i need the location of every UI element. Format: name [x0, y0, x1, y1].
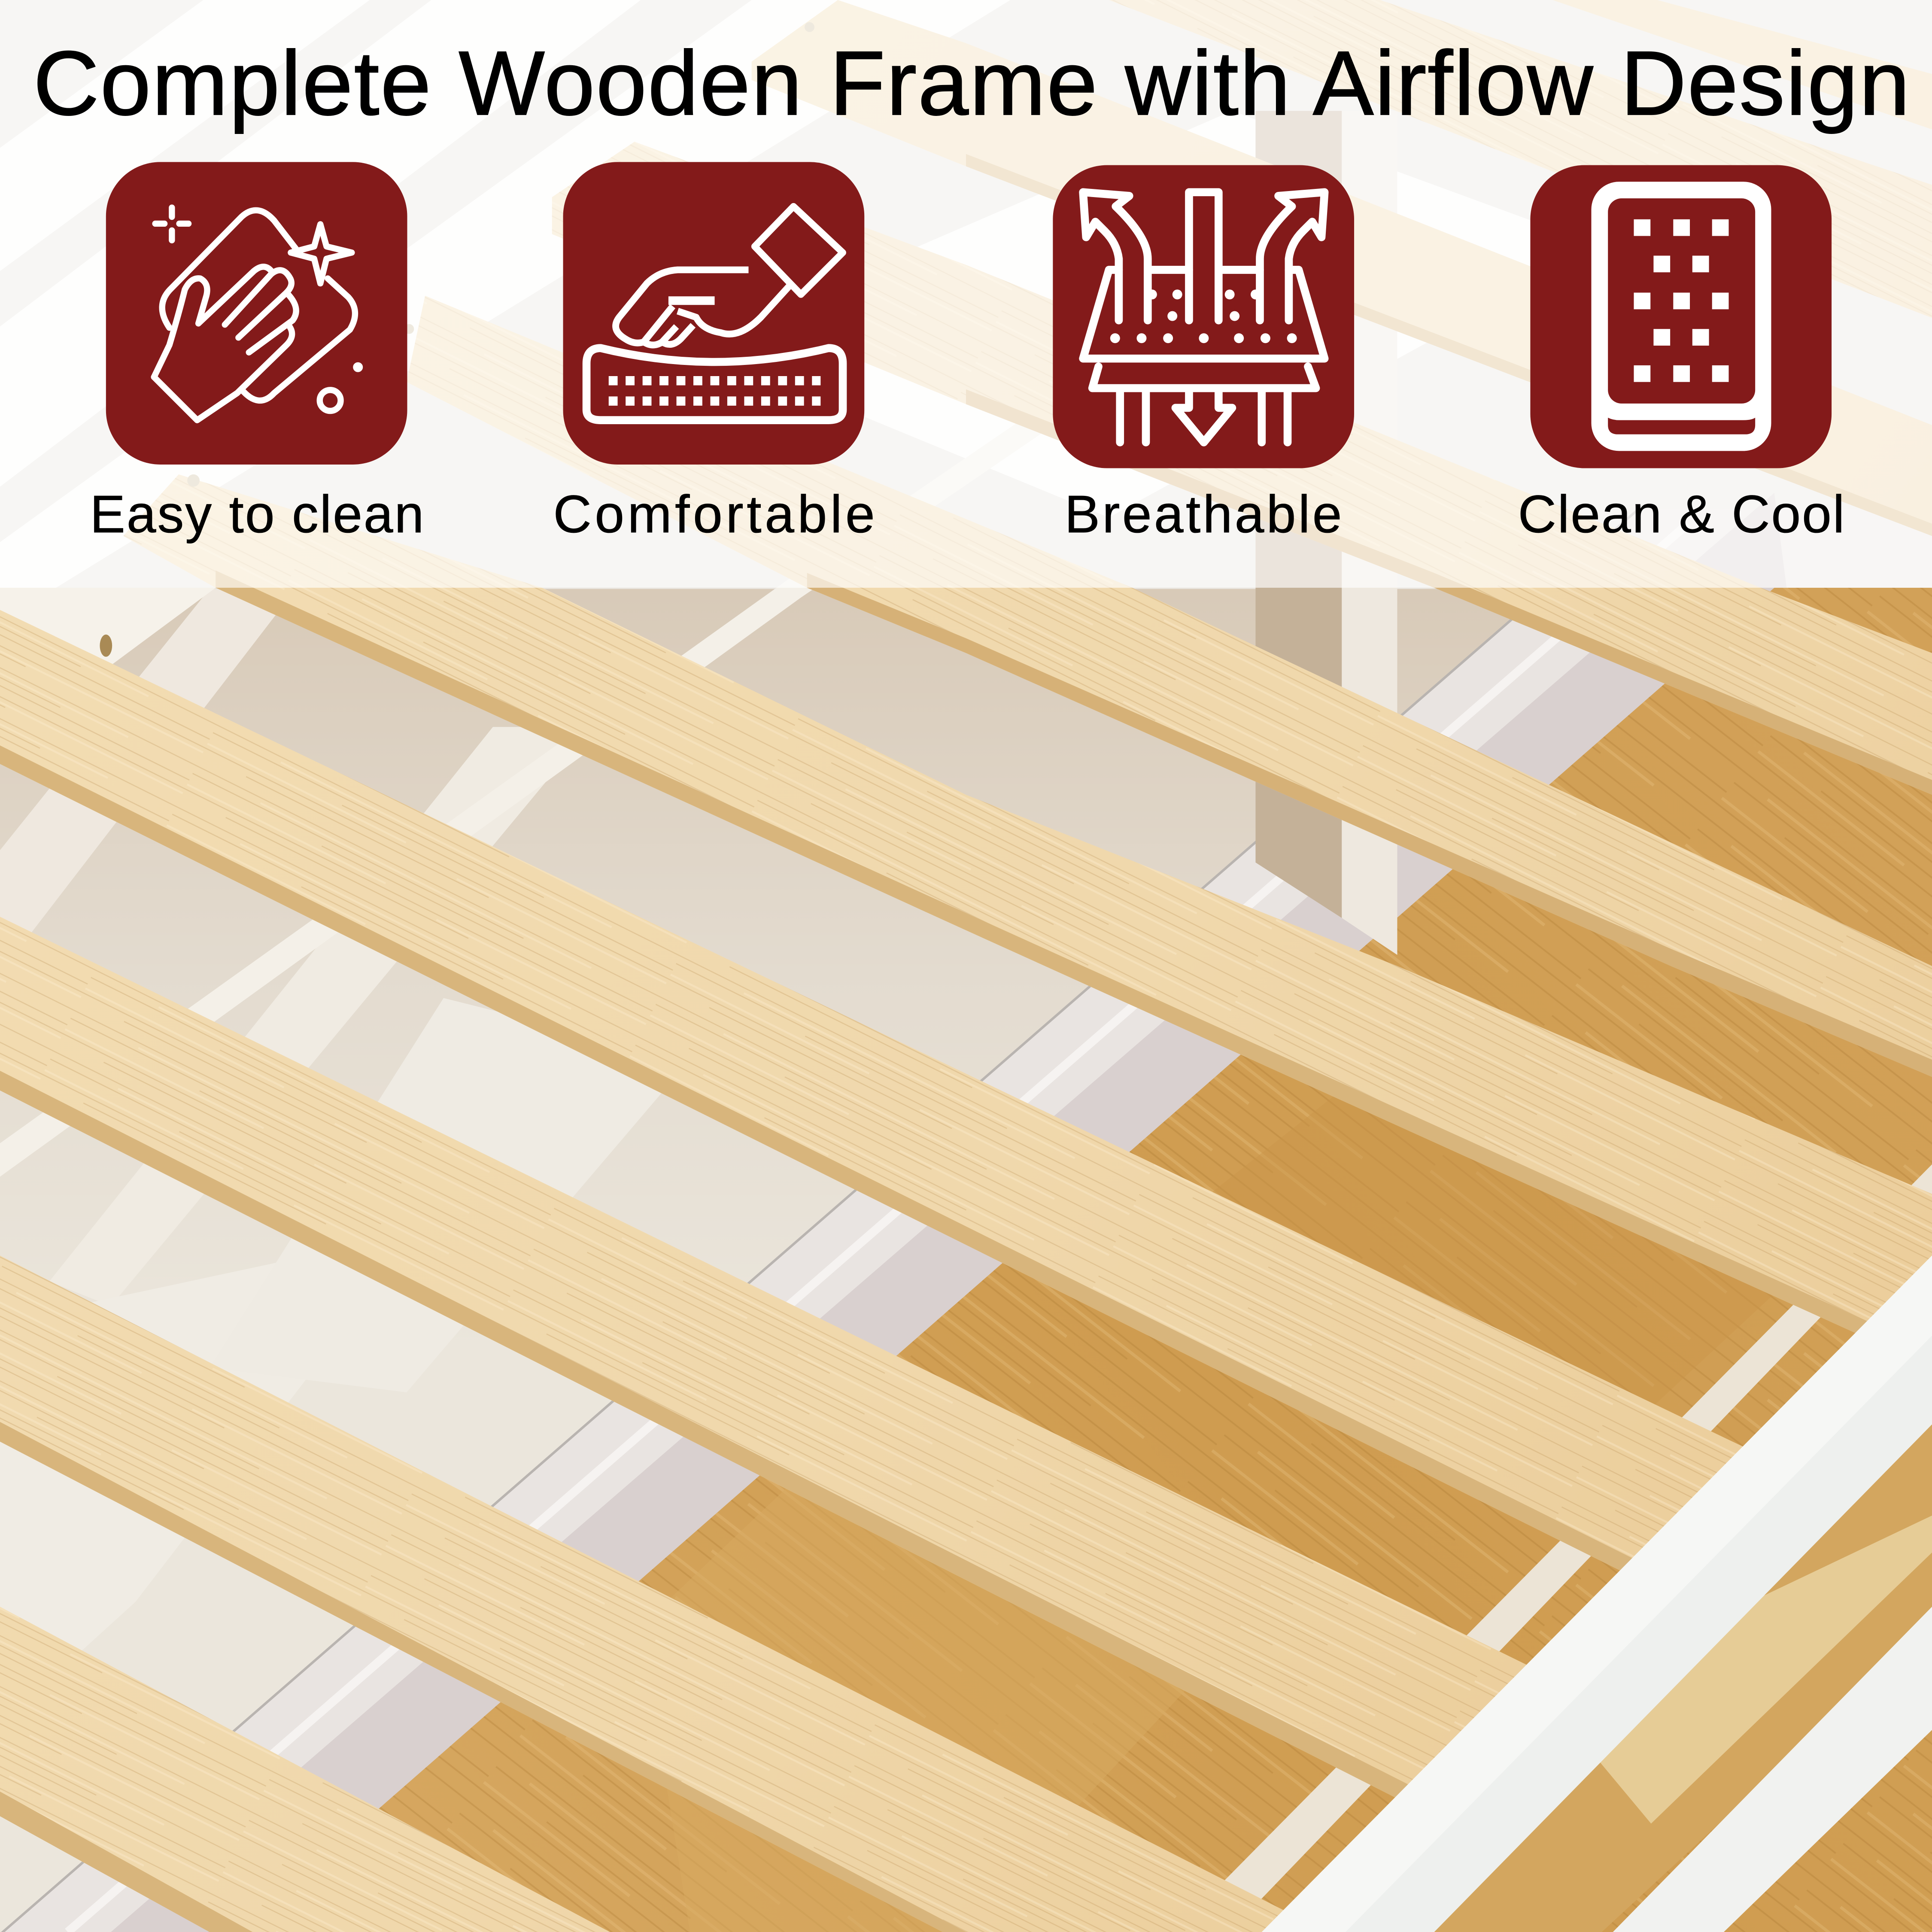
slat 10: [0, 1607, 610, 1932]
slat 3: [752, 0, 1932, 536]
label: Easy to clean: Easy to clean: [90, 485, 424, 544]
label: Comfortable: Comfortable: [553, 485, 875, 544]
slat 5: [407, 296, 1932, 1077]
slat 9: [0, 1255, 1355, 1932]
slat 7: [0, 610, 1823, 1623]
label: Breathable: Breathable: [1065, 485, 1342, 544]
icon: clean and cool mattress: [1530, 165, 1832, 468]
icon: comfortable: [563, 162, 864, 465]
slat 1 (far corner): [1552, 0, 1932, 129]
gap between the white rails showing slat ends: [1417, 1405, 1932, 1932]
corner bracket and end of lower slats: [0, 588, 216, 665]
icon: easy to clean: [106, 162, 407, 465]
support straps: [0, 419, 1932, 1904]
header overlay band: [0, 0, 1932, 588]
white frame rail: front: [1262, 1255, 1932, 1932]
label: Clean and Cool: Clean & Cool: [1518, 485, 1844, 544]
icon: breathable: [1053, 165, 1354, 468]
slat 8: [0, 917, 1602, 1827]
bed leg post: [1255, 111, 1397, 955]
title: Complete Wooden Frame with Airflow Design: [33, 33, 1910, 134]
background: white bed rails seen under the header: [0, 0, 1602, 622]
slat 6: [123, 474, 1932, 1368]
slat 4: [552, 142, 1932, 795]
slat 2: [1109, 0, 1932, 318]
small screws: [187, 22, 814, 487]
baseboard along the wall: [0, 493, 1932, 1932]
white frame rail: rear: [1613, 1607, 1932, 1932]
floor: wooden planks: [238, 588, 1932, 1932]
